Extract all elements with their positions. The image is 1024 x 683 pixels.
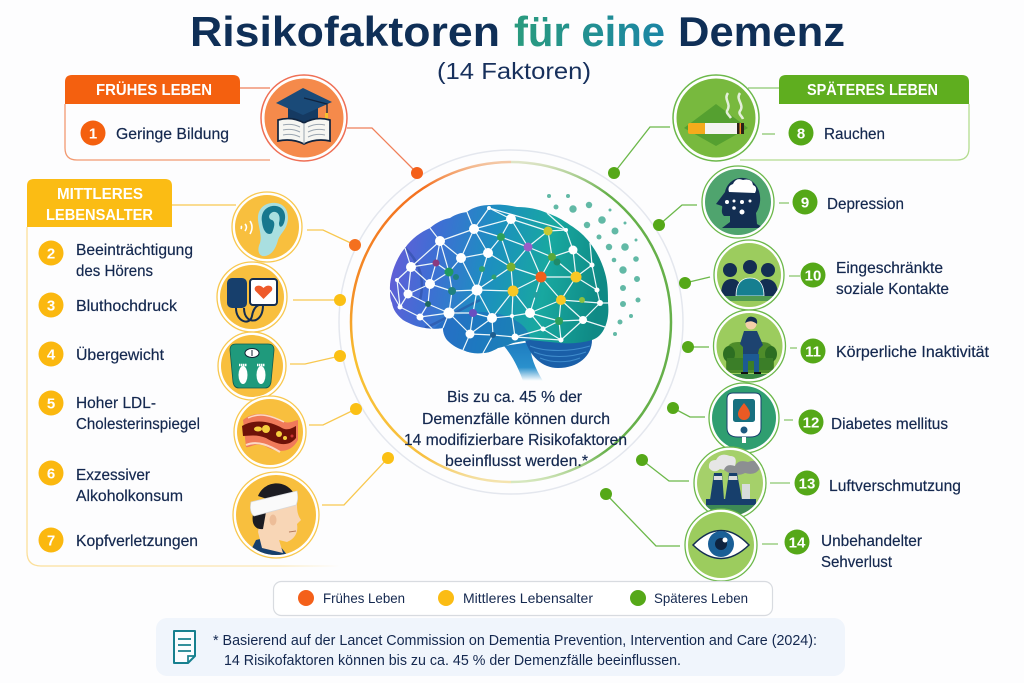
heading: späteres Leben: SPÄTERES LEBEN xyxy=(807,81,938,99)
heading: mittleres Lebensalter: MITTLERES xyxy=(57,186,143,203)
white network nodes xyxy=(395,206,603,342)
icon: physical inactivity xyxy=(714,310,786,382)
factor 2: 2 xyxy=(47,246,55,262)
icon: limited social contacts xyxy=(714,240,784,310)
footnote: * Basierend auf der Lancet Commission on Dementia Prevention, Intervention and Care (2024): xyxy=(213,632,817,649)
factor 2 xyxy=(38,240,193,280)
connector lines xyxy=(172,88,800,546)
factor 11: 11 xyxy=(805,344,821,360)
brain stem xyxy=(504,342,543,381)
factor 2: Beeinträchtigung xyxy=(76,242,193,259)
central statement text: Bis zu ca. 45 % der xyxy=(447,389,583,406)
factor 6: 6 xyxy=(47,466,55,482)
factor 14: Sehverlust xyxy=(821,554,893,571)
factor 10: Eingeschränkte xyxy=(836,260,943,277)
factor 10 xyxy=(800,260,949,298)
panel: mittleres Lebensalter xyxy=(27,179,340,566)
icon: blood pressure monitor xyxy=(217,262,287,332)
factor 14 xyxy=(784,530,923,571)
factor 7: 7 xyxy=(47,532,55,550)
central statement text xyxy=(404,389,627,470)
factor 5: Hoher LDL- xyxy=(76,395,156,412)
factor 8: 8 xyxy=(797,126,805,142)
scattered dots xyxy=(547,194,640,336)
connector dots xyxy=(334,167,694,500)
factor 13 xyxy=(794,470,961,496)
icon: air pollution xyxy=(694,447,766,519)
subtitle: (14 Faktoren) xyxy=(437,58,591,84)
factor 9 xyxy=(792,190,904,214)
factor 11 xyxy=(800,338,990,364)
factor 12: 12 xyxy=(803,414,819,432)
cerebellum xyxy=(525,340,592,368)
title xyxy=(190,8,845,55)
factor 7 xyxy=(38,528,198,552)
factor 4: 4 xyxy=(47,346,56,364)
factor 3 xyxy=(38,292,178,318)
factor 1: 1 xyxy=(89,126,97,142)
factor 6 xyxy=(38,460,183,505)
factor 9: Depression xyxy=(827,196,904,213)
legend: Mittleres Lebensalter xyxy=(463,590,593,606)
factor 12: Diabetes mellitus xyxy=(831,416,948,433)
factor 3: 3 xyxy=(47,298,55,314)
factor 12 xyxy=(798,410,948,434)
factor 6: Exzessiver xyxy=(76,467,151,484)
icon: clogged artery xyxy=(234,396,306,468)
central ring xyxy=(339,150,683,494)
central brain illustration xyxy=(156,75,990,676)
heading: frühes Leben xyxy=(65,75,240,104)
factor 8: Rauchen xyxy=(824,126,885,143)
factor 14: Unbehandelter xyxy=(821,533,923,550)
factor 14: 14 xyxy=(789,534,806,552)
icon: graduation cap and book xyxy=(261,75,347,161)
heading: mittleres Lebensalter xyxy=(27,179,172,227)
factor 1: Geringe Bildung xyxy=(116,126,229,143)
legend: Späteres Leben xyxy=(654,590,748,606)
icon: head with bandage xyxy=(233,472,319,560)
factor 9: 9 xyxy=(801,194,809,212)
heading: mittleres Lebensalter: LEBENSALTER xyxy=(46,207,153,224)
factor 7: Kopfverletzungen xyxy=(76,533,198,550)
factor 10: soziale Kontakte xyxy=(836,281,949,298)
factor 5: 5 xyxy=(47,396,55,412)
title: für eine xyxy=(514,8,665,55)
title: Risikofaktoren xyxy=(190,8,500,55)
factor 2: des Hörens xyxy=(76,263,153,280)
factor 13: 13 xyxy=(799,476,815,492)
central statement text: Demenzfälle können durch xyxy=(422,411,610,428)
factor 4: Übergewicht xyxy=(76,346,165,364)
central statement text: 14 modifizierbare Risikofaktoren xyxy=(404,432,627,449)
brain hemisphere network xyxy=(385,194,640,368)
icon: ear xyxy=(232,192,302,262)
coloured network nodes xyxy=(425,226,585,338)
title: Demenz xyxy=(678,8,845,55)
factor 10: 10 xyxy=(805,268,821,284)
icon: depression xyxy=(702,166,774,238)
factor 3: Bluthochdruck xyxy=(76,298,178,315)
heading: späteres Leben xyxy=(779,75,969,104)
factor 4 xyxy=(38,342,165,366)
legend: Frühes Leben xyxy=(323,590,405,606)
panel: späteres Leben xyxy=(740,75,969,160)
panel: frühes Leben xyxy=(65,75,270,160)
legend xyxy=(274,582,772,616)
footnote xyxy=(156,618,845,676)
factor 5 xyxy=(38,390,200,433)
factor 13: Luftverschmutzung xyxy=(829,478,961,495)
footnote: 14 Risikofaktoren können bis zu ca. 45 % der Demenzfälle beeinflussen. xyxy=(224,652,681,669)
heading: frühes Leben: FRÜHES LEBEN xyxy=(96,80,212,99)
factor 1 xyxy=(80,120,229,146)
factor 5: Cholesterinspiegel xyxy=(76,416,200,433)
icon: glucose meter xyxy=(709,383,779,453)
icon: weighing scale xyxy=(218,332,286,400)
central statement text: beeinflusst werden.* xyxy=(445,453,588,470)
factor 11: Körperliche Inaktivität xyxy=(836,344,990,361)
factor 6: Alkoholkonsum xyxy=(76,488,183,505)
factor 8 xyxy=(788,120,885,146)
icon: document xyxy=(174,631,195,663)
icon: cigarette xyxy=(673,75,759,161)
icon: eye xyxy=(685,509,757,581)
